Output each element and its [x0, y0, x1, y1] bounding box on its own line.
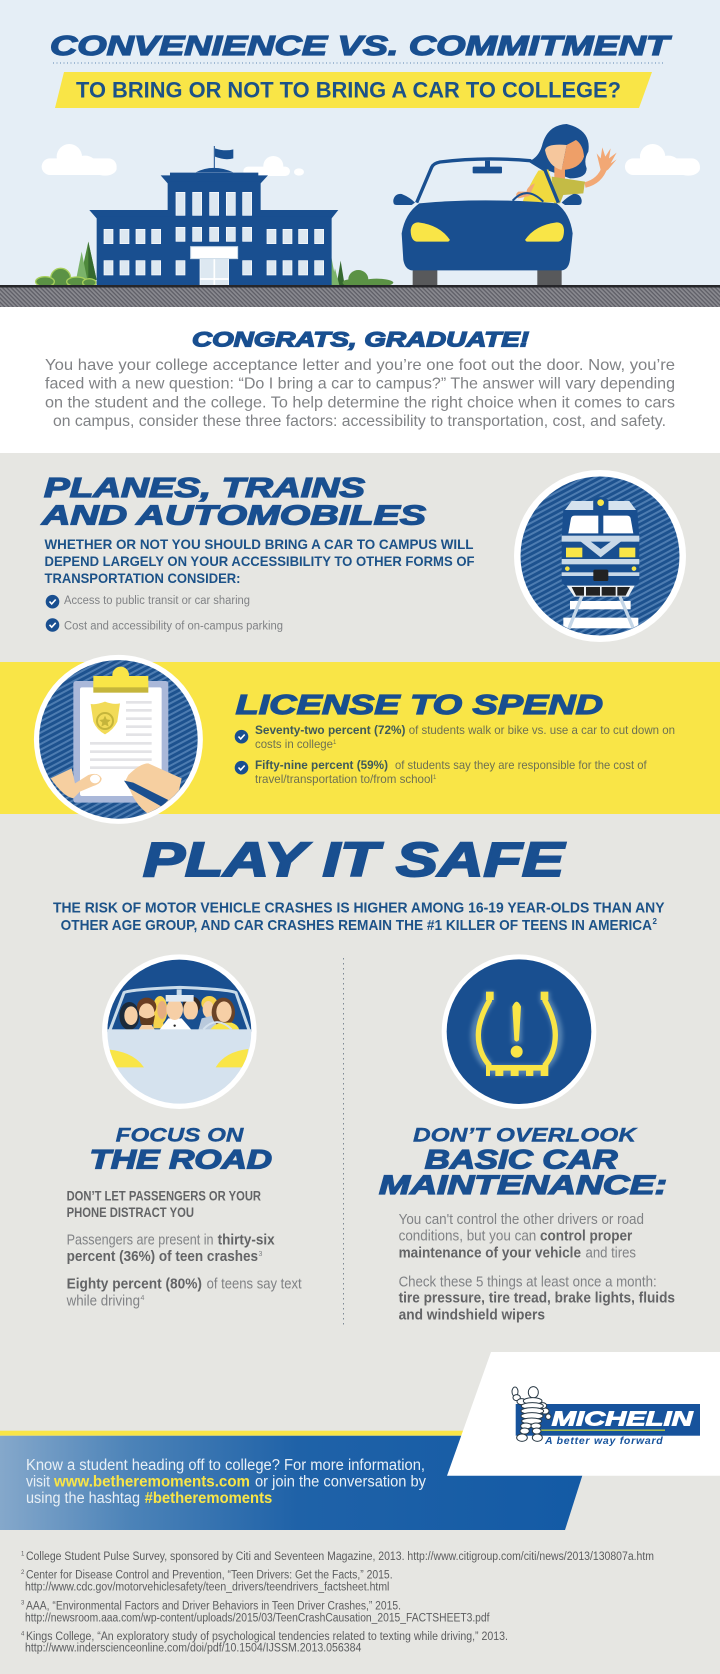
text block: references: http://www.inderscienceonline.com/doi/pdf/10.1504/IJSSM.2013.056384 [25, 1643, 362, 1655]
heading: focus on the road [90, 1126, 272, 1174]
text block: maintenance: control proper [540, 1229, 633, 1245]
text block: maintenance: conditions, but you can [399, 1229, 536, 1245]
text block: maintenance: maintenance of your vehicle [399, 1245, 581, 1261]
text block: risk statement [53, 899, 664, 934]
heading: planes trains: PLANES, TRAINS [44, 472, 366, 503]
text block: call to action [26, 1457, 426, 1507]
text block: references: 3 [21, 1600, 25, 1606]
text block: maintenance: tire pressure, tire tread, brake lights, fluids [399, 1291, 675, 1307]
text block: references: http://newsroom.aaa.com/wp-content/uploads/2015/03/TeenCrashCausation_2015_FACTSHEET3.pdf [25, 1612, 490, 1624]
text block: references: AAA, “Environmental Factors and Driver Behaviors in Teen Driver Crashes,” 2015. [26, 1600, 401, 1612]
text block: distraction: of teens say text [207, 1277, 302, 1293]
panel: planes, trains and automobiles [41, 470, 686, 642]
text block: maintenance [399, 1212, 675, 1323]
icon: train [514, 470, 686, 642]
text block: maintenance: Check these 5 things at least once a month: [399, 1275, 657, 1291]
heading: basic car maintenance [379, 1126, 667, 1200]
text block: distraction: PHONE DISTRACT YOU [67, 1205, 194, 1220]
heading: basic car maintenance: MAINTENANCE: [379, 1170, 667, 1200]
heading: basic car maintenance: DON’T OVERLOOK [413, 1126, 638, 1147]
bullet: 72 percent: 1 [333, 740, 337, 746]
michelin tagline: A better way forward [544, 1435, 663, 1447]
panel: intro [0, 307, 720, 453]
road [0, 285, 720, 307]
text block: references: 2 [21, 1570, 25, 1576]
bullet: 72 percent: of students walk or bike vs. use a car to cut down on [409, 723, 675, 737]
text block: accessibility: DEPEND LARGELY ON YOUR ACCESSIBILITY TO OTHER FORMS OF [44, 554, 474, 569]
text block: distraction: while driving [66, 1293, 140, 1309]
illustration: campus [36, 144, 700, 289]
icon: clipboard [34, 655, 203, 824]
text block: accessibility [44, 537, 474, 586]
title: CONVENIENCE VS. COMMITMENT [50, 30, 672, 61]
text block: references: http://www.cdc.gov/motorvehiclesafety/teen_drivers/teendrivers_factsheet.html [25, 1582, 389, 1594]
panel: license to spend [0, 655, 720, 824]
icon: michelin man [512, 1387, 551, 1441]
text block: intro paragraph: on campus, consider these three factors: accessibility to transportation, cost, and safety. [53, 413, 666, 430]
heading: planes trains [41, 472, 427, 531]
text block: references: Kings College, “An exploratory study of psychological tendencies related to texting while driving,” 2013. [26, 1631, 508, 1643]
heading: focus on the road: FOCUS ON [116, 1126, 245, 1147]
icon: blue car [393, 159, 582, 286]
text block: maintenance: You can't control the other drivers or road [399, 1212, 644, 1228]
bullet: 59 percent: Fifty-nine percent (59%) [255, 758, 388, 772]
bullet: 72 percent: Seventy-two percent (72%) [255, 723, 406, 737]
text block: distraction: Eighty percent (80%) [67, 1277, 202, 1293]
subtitle banner [55, 72, 652, 108]
bullet: parking: Cost and accessibility of on-campus parking [64, 621, 283, 633]
text block: intro paragraph: on the student and the college. To help determine the right choice when it comes to cars [45, 394, 675, 411]
heading: basic car maintenance: BASIC CAR [425, 1144, 618, 1174]
text block: distraction: 4 [140, 1295, 144, 1302]
text block: call to action: visit [26, 1474, 51, 1491]
panel: play it safe [53, 834, 675, 1327]
text block: call to action: www.betheremoments.com [53, 1474, 250, 1491]
panel: michelin logo [447, 1352, 720, 1476]
michelin wordmark: MICHELIN [552, 1409, 693, 1431]
icon: college building [89, 146, 338, 286]
icon: tire pressure warning [442, 954, 596, 1109]
icon: clouds [42, 144, 700, 176]
text block: intro paragraph [45, 357, 675, 430]
heading: focus on the road: THE ROAD [90, 1144, 272, 1174]
panel: call to action [0, 1431, 595, 1530]
heading: congrats: CONGRATS, GRADUATE! [192, 328, 529, 352]
text block: risk statement: THE RISK OF MOTOR VEHICLE CRASHES IS HIGHER AMONG 16-19 YEAR-OLDS THAN ANY [53, 899, 664, 916]
text block: references: 4 [21, 1632, 25, 1638]
text block: accessibility: TRANSPORTATION CONSIDER: [44, 571, 240, 586]
text block: risk statement: OTHER AGE GROUP, AND CAR CRASHES REMAIN THE #1 KILLER OF TEENS IN AMERICA [61, 917, 652, 934]
text block: distraction: DON’T LET PASSENGERS OR YOUR [67, 1188, 261, 1203]
text block: references [21, 1551, 654, 1655]
icon: car full of passengers [100, 950, 260, 1109]
bullet: public transit: Access to public transit or car sharing [64, 595, 250, 607]
bullet: 59 percent [235, 758, 647, 786]
bullet: 59 percent: of students say they are responsible for the cost of [395, 758, 647, 772]
text block: references: College Student Pulse Survey, sponsored by Citi and Seventeen Magazine, 2013. http://www.citigroup.com/citi/news/2013/130807a.htm [26, 1551, 654, 1563]
bullet: 59 percent: 1 [433, 775, 437, 781]
bullet: 59 percent: travel/transportation to/from school [255, 772, 433, 786]
subtitle banner: TO BRING OR NOT TO BRING A CAR TO COLLEGE? [76, 78, 621, 103]
icon: trees [36, 242, 393, 289]
text block: distraction: 3 [258, 1251, 262, 1258]
text block: maintenance: and tires [586, 1245, 636, 1261]
text block: references: 1 [21, 1552, 25, 1558]
text block: call to action: or join the conversation by [255, 1474, 426, 1491]
bullet: 72 percent [235, 723, 675, 751]
illustration: car with waving driver [393, 124, 617, 286]
text block: accessibility: WHETHER OR NOT YOU SHOULD BRING A CAR TO CAMPUS WILL [44, 537, 474, 552]
heading: play it safe: PLAY IT SAFE [143, 834, 567, 887]
text block: maintenance: and windshield wipers [399, 1307, 545, 1323]
text block: intro paragraph: faced with a new question: “Do I bring a car to campus?” The answer will vary depending [45, 376, 675, 393]
heading: license to spend: LICENSE TO SPEND [236, 689, 603, 720]
text block: distraction [66, 1188, 302, 1309]
panel: hero [0, 0, 720, 289]
text block: risk statement: 2 [652, 917, 658, 926]
text block: call to action: using the hashtag [26, 1490, 140, 1507]
text block: call to action: Know a student heading off to college? For more information, [26, 1457, 425, 1474]
heading: planes trains: AND AUTOMOBILES [41, 500, 427, 531]
icon: woman waving [513, 124, 617, 203]
text block: call to action: #betheremoments [145, 1490, 272, 1507]
text block: intro paragraph: You have your college acceptance letter and you’re one foot out the door. Now, you’re [45, 357, 675, 374]
passengers [119, 996, 239, 1030]
text block: distraction: thirty-six [218, 1232, 275, 1248]
text block: references: Center for Disease Control and Prevention, “Teen Drivers: Get the Facts,” 2015. [26, 1570, 393, 1582]
bullet: 72 percent: costs in college [255, 737, 333, 751]
text block: distraction: percent (36%) of teen crashes [67, 1249, 258, 1265]
text block: distraction: Passengers are present in [67, 1232, 213, 1248]
